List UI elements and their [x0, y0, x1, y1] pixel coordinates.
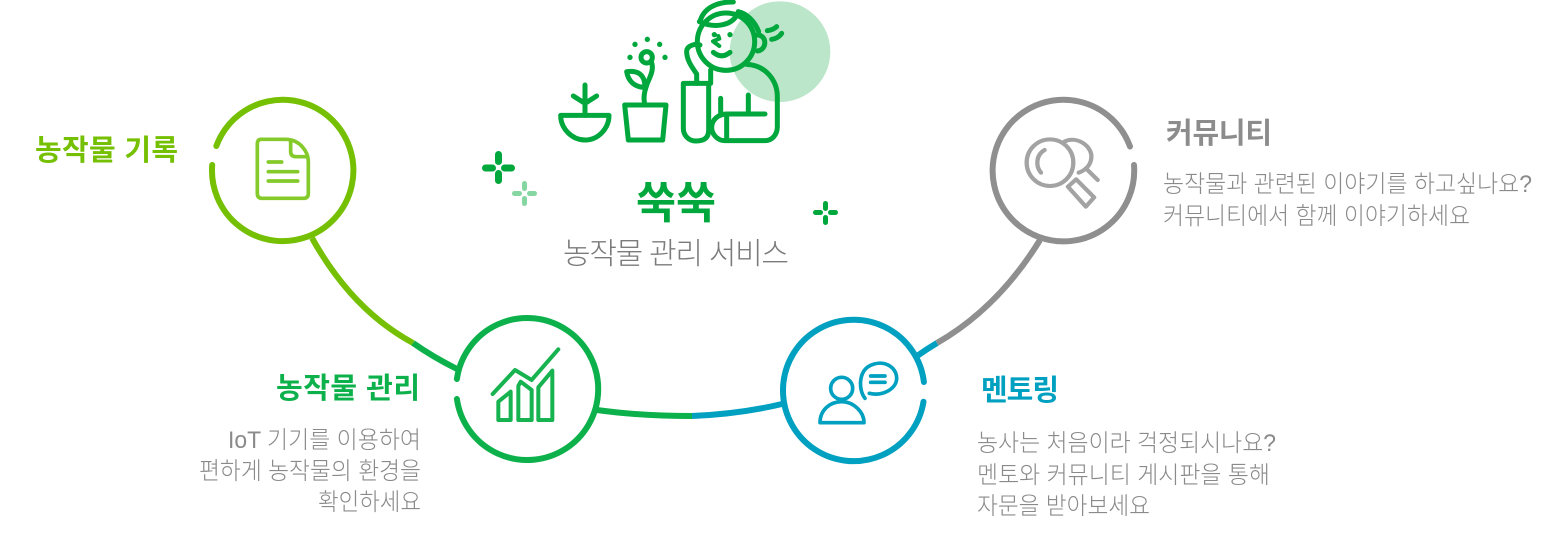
icon: growth chart	[493, 349, 558, 420]
description	[199, 427, 421, 516]
panel: community	[993, 100, 1532, 241]
sparkle: right	[813, 201, 838, 225]
description: 커뮤니티에서 함께 이야기하세요	[1163, 203, 1470, 230]
heading: 농작물 기록	[35, 134, 178, 167]
icon: potted flower	[625, 37, 668, 140]
panel: crop records	[35, 100, 353, 241]
sparkle: large	[482, 151, 515, 184]
icon: document	[257, 139, 308, 198]
heading: 멘토링	[981, 374, 1059, 407]
description	[977, 430, 1276, 520]
panel: mentoring	[783, 320, 1276, 520]
icon: person with speech bubble	[820, 363, 897, 423]
sparkle: pale	[512, 181, 537, 206]
description: 확인하세요	[318, 489, 421, 516]
description	[1163, 171, 1532, 230]
panel: crop management	[199, 318, 598, 516]
description: 멘토와 커뮤니티 게시판을 통해	[977, 462, 1270, 489]
description: 자문을 받아보세요	[977, 493, 1150, 520]
icon: sprout in bowl	[561, 85, 609, 140]
title: 쑥쑥	[636, 179, 716, 228]
heading: 커뮤니티	[1166, 117, 1272, 150]
central illustration: farmer and plants	[561, 1, 830, 141]
description: IoT 기기를 이용하여	[228, 427, 421, 454]
description: 농작물과 관련된 이야기를 하고싶나요?	[1163, 171, 1532, 198]
icon: magnifying glasses	[1027, 139, 1098, 207]
description: 농사는 처음이라 걱정되시나요?	[977, 430, 1276, 457]
heading: 농작물 관리	[276, 372, 420, 405]
subtitle: 농작물 관리 서비스	[563, 238, 789, 271]
connecting curve	[312, 238, 1040, 416]
description: 편하게 농작물의 환경을	[199, 458, 421, 485]
icon: farmer resting on arm	[683, 2, 782, 141]
